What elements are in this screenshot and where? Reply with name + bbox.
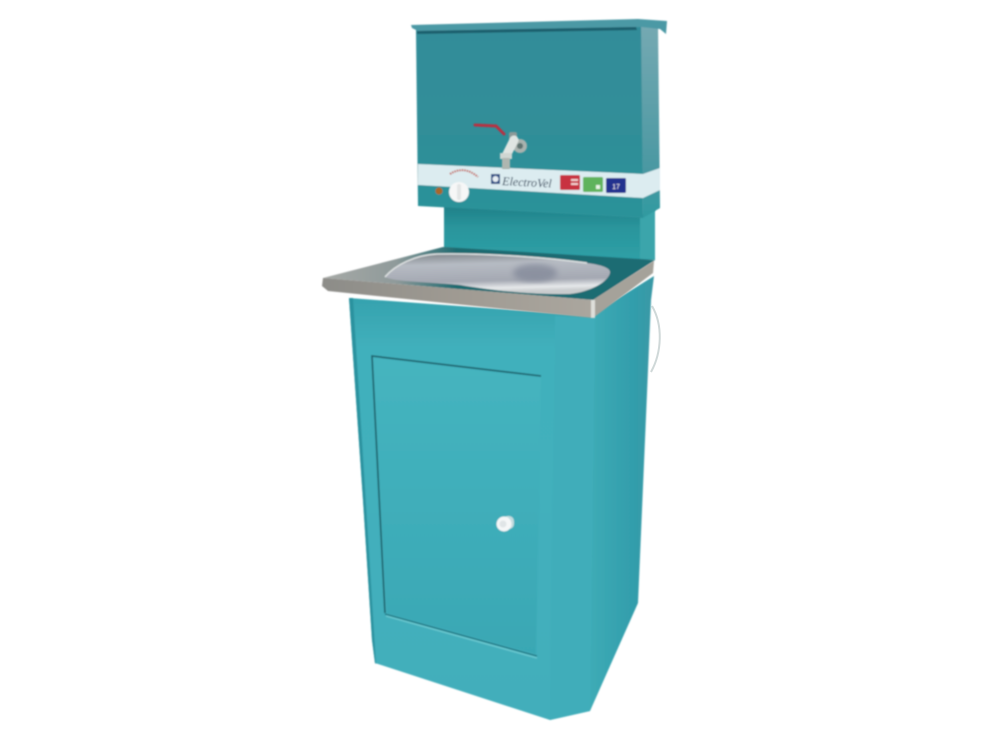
water tap xyxy=(475,125,527,169)
power cable xyxy=(651,306,660,372)
blue rating badge: 17 xyxy=(612,184,620,191)
brand name: ElectroVel xyxy=(501,174,553,191)
cabinet chamfered corner xyxy=(550,316,595,720)
stainless basin xyxy=(385,254,610,294)
tank front panel xyxy=(416,26,643,218)
tap handle xyxy=(475,125,504,134)
sink xyxy=(322,247,655,318)
temperature dial xyxy=(449,170,478,202)
water tank xyxy=(411,19,667,218)
power lamp xyxy=(435,187,443,195)
cabinet left edge strip xyxy=(349,298,376,664)
backsplash xyxy=(444,205,655,262)
sink top surface xyxy=(323,247,655,300)
brand logo xyxy=(491,174,500,184)
tank side panel xyxy=(640,24,660,218)
cabinet right side panel xyxy=(590,276,654,711)
label band xyxy=(418,164,660,202)
cabinet xyxy=(349,276,654,720)
door knob xyxy=(496,516,514,532)
tank lid xyxy=(411,19,667,34)
cabinet door xyxy=(372,356,541,658)
cabinet front panel xyxy=(349,298,595,720)
blue rating badge xyxy=(606,178,626,193)
red rating badge xyxy=(560,175,580,190)
sink front rim xyxy=(322,278,593,318)
green rating badge xyxy=(583,177,603,192)
